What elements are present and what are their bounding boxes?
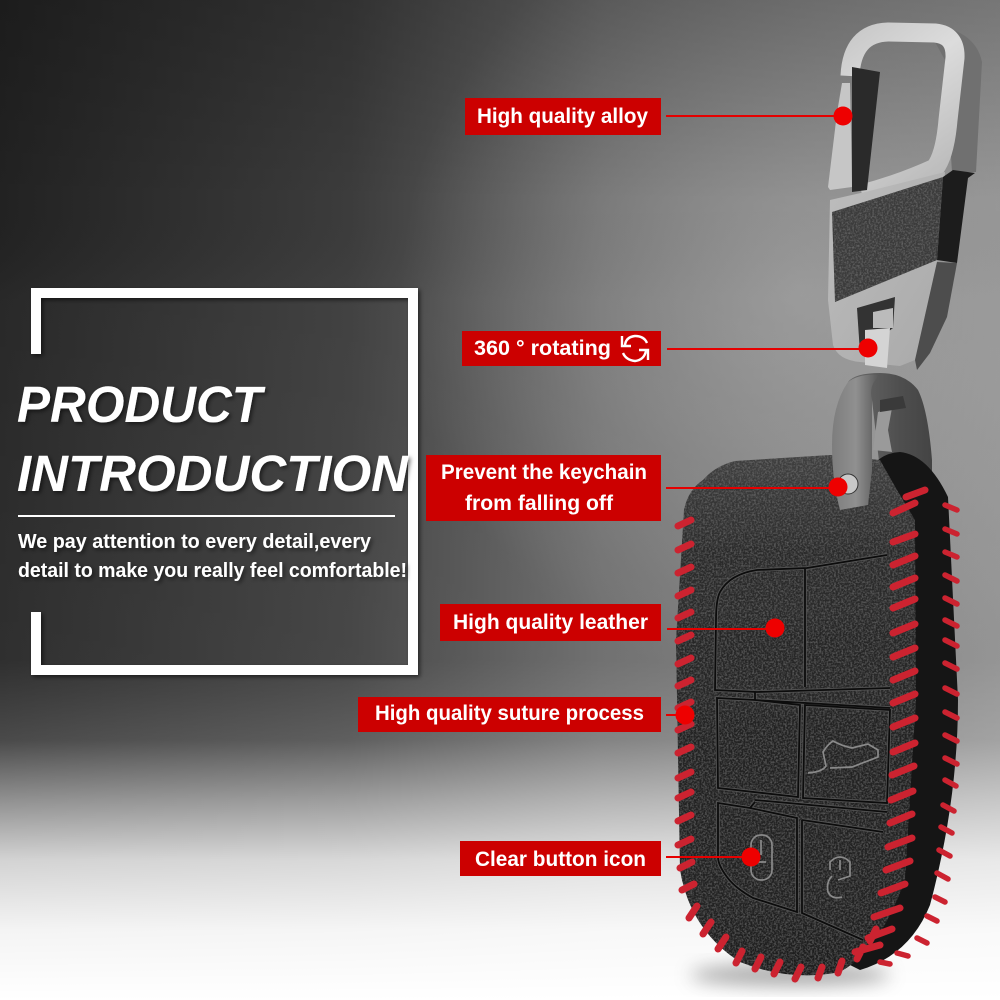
divider rule bbox=[18, 515, 395, 517]
intro text bbox=[18, 531, 407, 582]
carabiner body silver bbox=[828, 172, 945, 366]
icon: trunk bbox=[808, 741, 878, 773]
label: clear button icon: Clear button icon bbox=[475, 848, 646, 871]
carabiner dark side bbox=[937, 170, 975, 263]
ground shadow bbox=[690, 964, 890, 986]
icon: rotate arrows bbox=[622, 336, 648, 361]
label: high quality alloy bbox=[465, 98, 852, 135]
icon: lock bbox=[751, 835, 772, 880]
title: PRODUCT bbox=[17, 376, 266, 433]
carabiner back edge bbox=[925, 24, 982, 172]
label: clear button icon bbox=[460, 841, 760, 876]
label: 360 rotating: 360 ° rotating bbox=[474, 337, 611, 360]
title: INTRODUCTION bbox=[17, 445, 409, 502]
fob side panel bbox=[840, 452, 958, 970]
label: high quality alloy: High quality alloy bbox=[477, 105, 648, 128]
label: high quality suture process bbox=[358, 697, 694, 732]
swivel ring front arm bbox=[832, 375, 880, 510]
label: prevent the keychain: from falling off bbox=[465, 492, 614, 515]
carabiner slot and pin bbox=[857, 297, 895, 353]
label: high quality leather: High quality leather bbox=[453, 611, 648, 634]
fob front face bbox=[676, 455, 916, 975]
ring opening bbox=[873, 408, 892, 452]
panel: product introduction bbox=[17, 288, 418, 675]
intro text: detail to make you really feel comfortable! bbox=[18, 560, 407, 582]
carabiner leather inlay bbox=[832, 177, 943, 302]
key fob and keychain product bbox=[676, 24, 982, 986]
stitching bbox=[678, 490, 925, 979]
title bbox=[17, 376, 409, 502]
carabiner silver loop bbox=[850, 32, 955, 194]
carabiner gate silver bbox=[828, 83, 852, 190]
label: high quality leather bbox=[440, 604, 784, 641]
icon: unlock bbox=[828, 857, 850, 898]
carabiner gate dark bbox=[852, 67, 880, 192]
fob buttons bbox=[715, 555, 890, 940]
screw bbox=[838, 474, 858, 494]
frame bbox=[31, 288, 418, 675]
button icons bbox=[751, 741, 878, 898]
label: prevent the keychain: Prevent the keychain bbox=[441, 461, 647, 484]
label: prevent the keychain bbox=[426, 455, 848, 521]
label: high quality suture process: High quality suture process bbox=[375, 702, 644, 725]
label: 360 rotating bbox=[462, 331, 878, 366]
intro text: We pay attention to every detail,every bbox=[18, 531, 372, 553]
swivel ring back bbox=[848, 373, 932, 480]
